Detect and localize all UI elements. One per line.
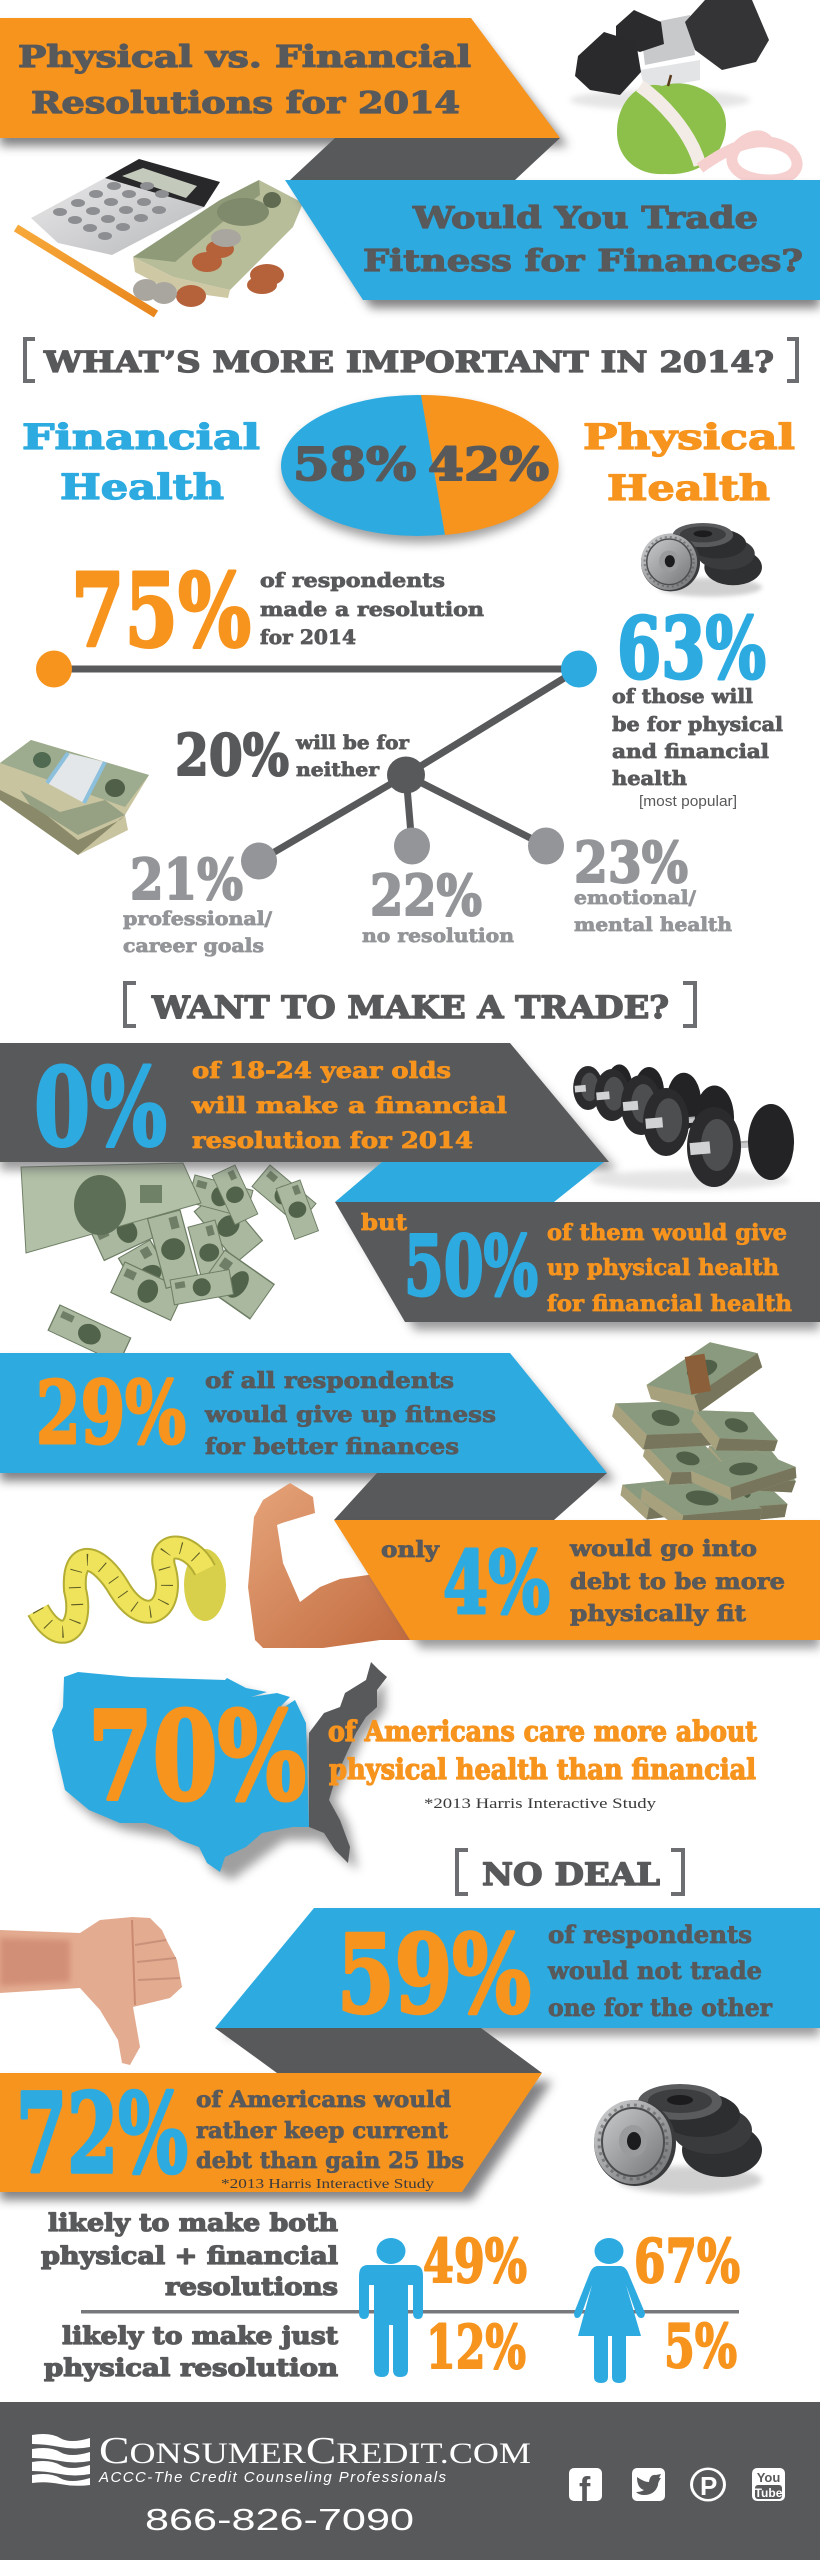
panel: 59% of respondents (215, 1908, 820, 2038)
stat: 63%: health (612, 766, 687, 790)
pie chart: 58% vs 42%: 58% (293, 438, 416, 491)
icon: logo waves (32, 2434, 90, 2486)
panel: 72% of Americans: *2013 Harris Interactive Study (221, 2177, 434, 2192)
panel: 0% of 18-24 year olds: resolution for 2014 (192, 1128, 473, 1154)
text: likely to make both (41, 2208, 338, 2301)
footer (0, 2402, 820, 2560)
connector: title ribbon fold (290, 138, 560, 180)
stat: 22% (362, 863, 514, 947)
stat: 75%: for 2014 (260, 625, 356, 649)
image: yellow tape measure (38, 1548, 226, 1632)
panel: 50% of them: of them would give (547, 1220, 787, 1246)
flow diagram: resolution branches (36, 650, 597, 880)
panel: 72% of Americans: debt than gain 25 lbs (196, 2148, 464, 2174)
image: row of dumbbells (573, 1064, 794, 1190)
image: flexed arm (248, 1483, 420, 1648)
stat: 70% of Americans: of Americans care more about (328, 1715, 757, 1748)
map: United States (52, 1662, 387, 1880)
stat: 63%: of those will (612, 684, 753, 708)
stat: 22%: no resolution (362, 925, 514, 947)
panel: 0% of 18-24 year olds (0, 1043, 609, 1171)
stat: men physical 12%: 12% (426, 2313, 526, 2383)
label: physical health: Health (607, 468, 770, 509)
stat: men both 49%: 49% (423, 2227, 527, 2297)
stat: 21% (123, 847, 272, 957)
stat: 20%: neither (296, 759, 380, 781)
panel: 0% of 18-24 year olds: will make a financial (191, 1093, 507, 1119)
stat: 70% of Americans: physical health than financial (329, 1753, 756, 1786)
stat: women physical 5%: 5% (664, 2312, 737, 2382)
stat: 75% (71, 551, 485, 670)
icon: youtube: You (757, 2470, 780, 2485)
panel: 0% of 18-24 year olds: 0% (34, 1045, 167, 1171)
stat: 21%: career goals (123, 935, 264, 957)
title banner (0, 18, 560, 138)
panel: 72% of Americans: rather keep current (196, 2118, 449, 2144)
panel: only 4%: debt to be more (570, 1569, 785, 1595)
panel: 50% of them: 50% (404, 1219, 538, 1315)
stat: 63%: and financial (612, 739, 769, 763)
stat: 63%: [most popular] (639, 793, 737, 810)
label: financial health: Financial (22, 417, 260, 458)
text: likely to make just: likely to make just (62, 2321, 338, 2350)
icon: pinterest: P (700, 2471, 717, 2501)
icon: youtube: Tube (755, 2486, 783, 2500)
icon: man (359, 2238, 423, 2377)
stat: 20%: will be for (295, 732, 410, 754)
stat: 23%: 23% (574, 830, 688, 896)
panel: 59% of respondents: 59% (337, 1912, 531, 2038)
label: physical health: Physical (583, 417, 795, 458)
stat: 21%: professional/ (123, 908, 272, 930)
text: likely to make both: likely to make both (48, 2208, 338, 2237)
panel: 72% of Americans: of Americans would (196, 2087, 451, 2113)
stat: 23%: mental health (574, 914, 732, 936)
shadow: 0% banner (0, 1051, 617, 1170)
panel: 29% of all respondents: of all respondents (205, 1368, 454, 1394)
panel: 72% of Americans (0, 2069, 542, 2198)
panel: 50% of them: but (361, 1210, 408, 1236)
stat: 20% (175, 722, 410, 789)
image: pencil (16, 228, 156, 314)
image: stack of cash (0, 740, 149, 855)
subtitle banner (285, 180, 820, 300)
stat: 63%: 63% (617, 599, 766, 698)
title line 2: Resolutions for 2014 (31, 86, 460, 121)
panel: only 4%: would go into (569, 1536, 757, 1562)
stat: 22%: 22% (370, 863, 482, 929)
panel: 0% of 18-24 year olds: of 18-24 year olds (192, 1058, 451, 1084)
icon: woman (574, 2238, 645, 2383)
title line 1: Physical vs. Financial (18, 40, 471, 75)
pie chart: 58% vs 42%: 42% (428, 438, 549, 491)
panel: 29% of all respondents: would give up fitness (204, 1402, 496, 1428)
heading: no deal (457, 1850, 683, 1894)
shadow: 50% banner (345, 1210, 820, 1330)
image: calculator (31, 159, 220, 255)
image: money and coins (133, 180, 303, 307)
text: likely to make just (44, 2321, 338, 2382)
icon: youtube (752, 2468, 785, 2501)
image: thumbs down hand (0, 1917, 182, 2065)
panel: 50% of them: for financial health (547, 1291, 792, 1317)
image: green apple with tape measure (617, 75, 797, 180)
heading: want to make a trade (125, 983, 695, 1026)
stat: 75%: made a resolution (260, 597, 485, 621)
heading: no deal: NO DEAL (482, 1857, 660, 1893)
shadow: subtitle banner (295, 188, 820, 308)
label: financial health: Health (60, 467, 224, 508)
icon: twitter (632, 2468, 665, 2501)
heading: want to make a trade: WANT TO MAKE A TRADE? (151, 990, 669, 1026)
text: likely to make both: physical + financial (41, 2241, 338, 2270)
image: weight plates (641, 523, 762, 597)
stat: 70% of Americans: *2013 Harris Interactive Study (424, 1796, 657, 1812)
stat: 20%: 20% (175, 722, 289, 789)
icon: facebook: f (579, 2471, 591, 2509)
phone number: 866-826-7090 (145, 2502, 414, 2537)
panel: only 4%: 4% (443, 1533, 550, 1634)
panel: 59% of respondents: one for the other (548, 1993, 772, 2022)
shadow: 29% banner (0, 1361, 615, 1481)
pie chart: 58% vs 42% (281, 395, 559, 543)
stat: 70% of Americans: 70% (88, 1684, 306, 1828)
panel: 29% of all respondents: 29% (36, 1363, 186, 1464)
image: weight plates (594, 2084, 762, 2194)
connector: grey fold (215, 2028, 542, 2073)
stat: women both 67%: 67% (634, 2227, 740, 2297)
logo wordmark: CONSUMER CREDIT.COM (99, 2430, 531, 2472)
shadow: title banner (0, 26, 568, 146)
connector: grey fold (334, 1473, 607, 1520)
icon: pinterest (690, 2468, 726, 2502)
panel: 29% of all respondents (0, 1353, 607, 1473)
label: financial health (22, 417, 260, 508)
panel: only 4%: physically fit (570, 1601, 747, 1627)
image: dumbbell (570, 0, 769, 110)
subtitle line 2: Fitness for Finances? (363, 244, 803, 279)
stat: 23%: emotional/ (574, 887, 696, 909)
heading: what's more important (25, 339, 797, 381)
shadow: 59% banner (225, 1916, 820, 2036)
subtitle line 1: Would You Trade (412, 201, 758, 236)
stat: 21%: 21% (130, 847, 243, 913)
stat: 23% (574, 830, 732, 936)
panel: only 4% (334, 1520, 820, 1640)
image: pile of cash lower (637, 1448, 798, 1540)
stat: 63% (612, 599, 783, 810)
stat: 75%: of respondents (260, 568, 445, 592)
stat: 75%: 75% (71, 551, 251, 670)
panel: only 4%: only (381, 1537, 440, 1563)
panel: 59% of respondents: would not trade (547, 1956, 762, 1985)
image: pile of cash (606, 1329, 803, 1537)
stat: 63%: be for physical (612, 712, 783, 736)
shadow: 4% banner (344, 1528, 820, 1648)
icon: facebook (569, 2468, 602, 2509)
panel: 50% of them (335, 1202, 820, 1322)
shadow: 72% banner (0, 2081, 552, 2200)
stat: 70% of Americans (88, 1684, 757, 1828)
panel: 59% of respondents: of respondents (548, 1920, 752, 1949)
panel: 50% of them: up physical health (547, 1255, 779, 1281)
tagline: ACCC-The Credit Counseling Professionals (98, 2469, 447, 2486)
text: likely to make just: physical resolution (44, 2353, 338, 2382)
connector: blue fold (335, 1162, 604, 1202)
panel: 29% of all respondents: for better finances (205, 1434, 459, 1460)
panel: 72% of Americans: 72% (16, 2069, 188, 2198)
image: flying money (21, 1163, 318, 1363)
text: likely to make both: resolutions (165, 2272, 338, 2301)
label: physical health (583, 417, 795, 509)
heading: what's more important: WHAT’S MORE IMPORTANT IN 2014? (43, 345, 774, 379)
